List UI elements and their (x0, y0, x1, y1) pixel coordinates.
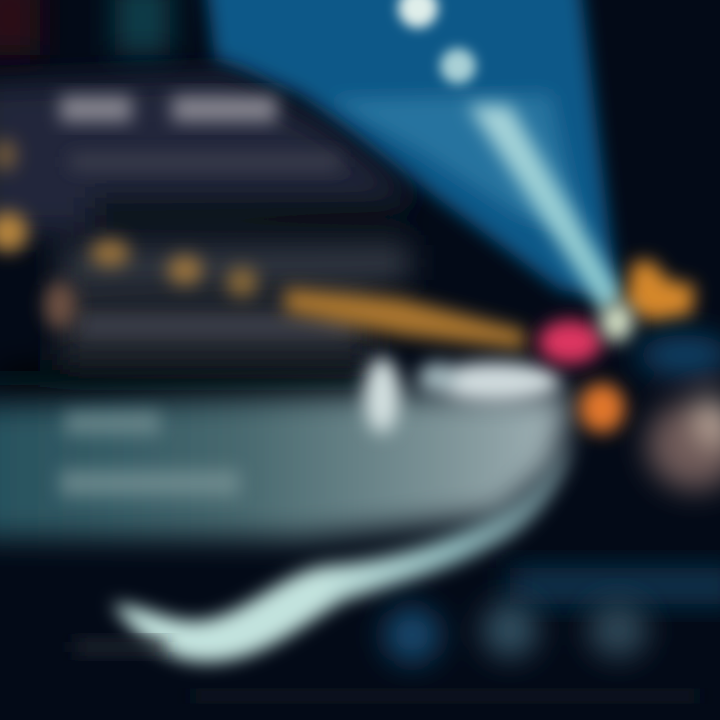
text block: faint upper streaks (70, 155, 350, 334)
panel: dark upper text block (0, 75, 410, 389)
panel: right blue and tan blobs (637, 335, 720, 490)
icons: orange bullet dots (0, 139, 258, 329)
panel: white highlights (364, 357, 560, 433)
panel: lower right blue band (510, 568, 720, 604)
icons: white circles at top (398, 0, 476, 84)
icon: centre node (600, 302, 634, 342)
panel: sea band (0, 395, 572, 538)
icon: pink node (538, 320, 602, 364)
icon: orange node bottom (579, 383, 625, 433)
heading: blurred title (60, 96, 277, 122)
panel: top left dark colour blocks (0, 0, 170, 55)
arrow: orange beam (285, 288, 525, 350)
text block: blurred lower captions (60, 412, 240, 496)
icons: bottom row (384, 602, 648, 663)
icon: orange node right (625, 260, 695, 322)
text block: footer line (190, 692, 700, 700)
arrow: light beam (468, 105, 622, 315)
chart: white wave curve (112, 440, 570, 662)
text block: bottom left caption (75, 640, 165, 654)
panel: blue sky (205, 0, 618, 300)
